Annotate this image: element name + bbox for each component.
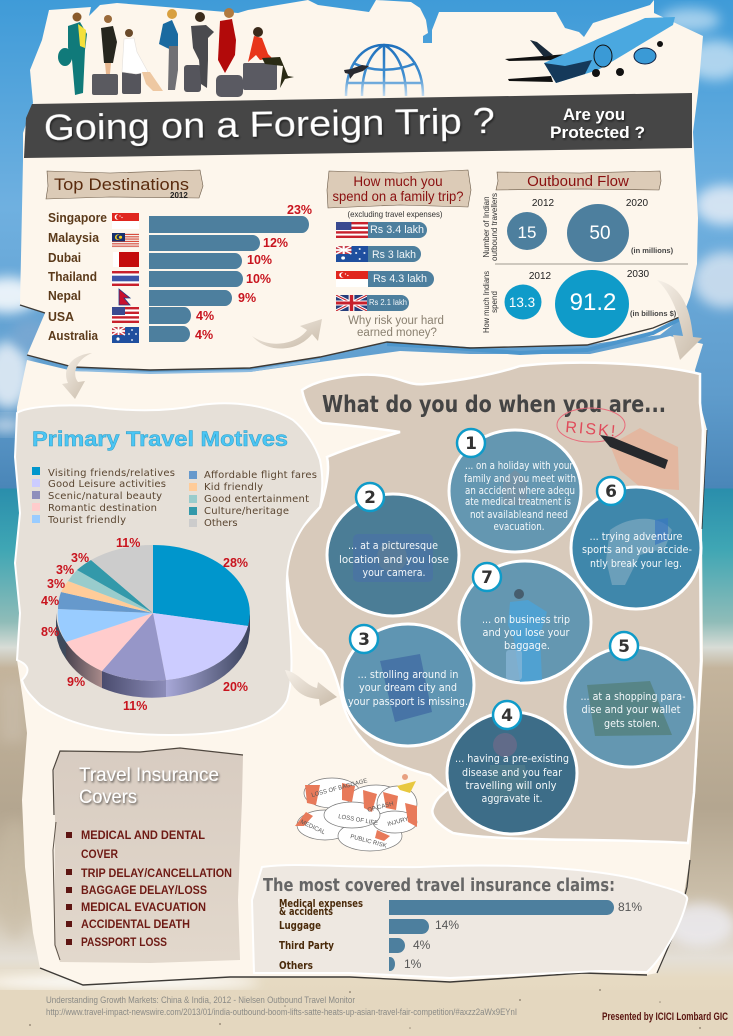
bar chart: claims: & accidents — [279, 906, 333, 918]
scenario 4 — [447, 701, 577, 834]
heading: family trip spending: spend on a family trip? — [332, 189, 464, 204]
pie chart: 28% — [223, 556, 248, 570]
country flags — [112, 213, 139, 343]
spending rows: Rs 2.1 lakh — [369, 297, 407, 307]
legend: Visiting friends/relatives — [48, 468, 175, 479]
bar chart: destinations: 10% — [247, 253, 272, 267]
scenario 2: ... at a picturesque — [348, 539, 438, 552]
pie chart — [41, 536, 250, 713]
callout: why risk — [348, 315, 444, 339]
scenario 5: gets stolen. — [604, 717, 660, 730]
panel: primary travel motives background — [15, 403, 322, 735]
scenario 1: an accident where adequ — [465, 484, 575, 497]
scenario 1: family and you meet with — [464, 472, 576, 485]
bar chart: claims: 14% — [435, 918, 459, 932]
illustration: lifebuoy risks: MEDICAL — [299, 819, 326, 836]
subtitle: are you protected: Protected ? — [550, 123, 645, 142]
axis labels: Number of Indian — [482, 196, 491, 258]
subtitle: are you protected: Are you — [563, 105, 625, 124]
scenario 4: aggravate it. — [482, 792, 542, 805]
bubble chart: number of travellers: (in millions) — [631, 246, 674, 255]
icon: globe with small plane — [344, 45, 423, 96]
icon: hand writing risk — [557, 408, 679, 490]
scenario 2: location and you lose — [339, 553, 449, 566]
heading: top destinations: 2012 — [170, 191, 188, 200]
pie chart: 11% — [123, 699, 147, 713]
heading: outbound flow — [496, 171, 661, 190]
source citations: http://www.travel-impact-newswire.com/2013/01/india-outbound-boom-lifts-satte-heats-up-asian-travel-fair-competition/#axzz2aWx9EYnI — [46, 1007, 517, 1017]
panel: travel insurance covers — [53, 748, 243, 963]
scenario 5: ... at a shopping para- — [580, 690, 686, 703]
bar chart: destinations: 23% — [287, 203, 312, 217]
scenario 1: ... on a holiday with your — [465, 459, 573, 472]
bubble chart: number of travellers: 2012 — [532, 198, 555, 209]
bubble chart: spending — [504, 269, 677, 338]
title: Going on a Foreign Trip ? — [43, 100, 495, 148]
bubble chart: number of travellers: 15 — [518, 223, 536, 242]
country labels: Singapore — [48, 210, 107, 225]
scenario 1: 1 — [465, 434, 477, 454]
scenario 2: your camera. — [362, 566, 426, 579]
heading: what do you do when you are: What do you do when you are... — [322, 392, 666, 418]
bar chart: claims: 81% — [618, 900, 642, 914]
legend: Affordable flight fares — [204, 470, 317, 481]
panel: family trip spending — [327, 170, 471, 339]
bubble chart: number of travellers: 2020 — [626, 198, 649, 209]
bar chart: claims: 1% — [404, 957, 422, 971]
legend: Tourist friendly — [47, 515, 126, 526]
panel: family trip spending: (excluding travel expenses) — [348, 209, 443, 219]
panel: what do you do background blob — [287, 363, 703, 843]
heading: travel insurance covers: Covers — [79, 787, 137, 808]
scenario 4: ... having a pre-existing — [455, 752, 569, 765]
scenario 7: and you lose your — [482, 626, 570, 639]
legend: Good entertainment — [204, 494, 309, 505]
scenario 6: 6 — [605, 482, 617, 502]
country labels: Nepal — [48, 288, 81, 303]
country labels: Dubai — [48, 250, 81, 265]
bar chart: destinations: 4% — [196, 309, 214, 323]
illustration: lifebuoy risks: LOSS OF BAGGAGE — [311, 778, 368, 799]
illustration: lifebuoy risks: OF CASH — [367, 801, 394, 814]
pie chart: 4% — [41, 594, 59, 608]
scenario 4: 4 — [501, 706, 513, 726]
panel: outbound flow — [482, 171, 688, 338]
callout: why risk: earned money? — [357, 327, 437, 339]
scenario 1: evacuation. — [494, 520, 544, 533]
heading: outbound flow: Outbound Flow — [527, 173, 629, 190]
pie chart: 3% — [47, 577, 65, 591]
country labels — [48, 210, 107, 343]
scenario 7: 7 — [481, 568, 493, 588]
illustration: lifebuoy risks — [295, 774, 417, 851]
list of covers: PASSPORT LOSS — [81, 935, 167, 949]
bar chart: destinations: 10% — [246, 272, 271, 286]
scenario 1: ate medical treatment is — [465, 495, 571, 508]
arrow: motives to scenarios — [285, 670, 337, 706]
bubble chart: spending: 13.3 — [509, 295, 535, 310]
country labels: Malaysia — [48, 230, 100, 245]
arrow: destinations to motives — [62, 353, 92, 399]
list of covers: ACCIDENTAL DEATH — [81, 917, 190, 931]
scenario 4: disease and you fear — [462, 766, 562, 779]
bar chart: claims — [279, 898, 642, 972]
spending rows — [336, 222, 434, 311]
bubble chart: number of travellers — [507, 198, 674, 262]
bar chart: destinations: 4% — [195, 328, 213, 342]
illustration: lifebuoy risks: LOSS OF LIFE — [338, 814, 378, 827]
heading: top destinations — [46, 170, 203, 200]
scenario 3: your passport is missing. — [348, 695, 468, 708]
bubble chart: number of travellers: 50 — [589, 223, 611, 244]
subtitle: are you protected — [550, 105, 645, 142]
title banner — [24, 93, 692, 158]
pie chart: 11% — [116, 536, 140, 550]
scenario 4: travelling will only — [466, 779, 557, 792]
torn paper: upper sheet — [20, 0, 703, 373]
spending rows: Rs 4.3 lakh — [373, 273, 427, 285]
panel: most covered claims — [252, 865, 687, 978]
bar chart: claims: Medical expenses — [279, 898, 363, 910]
country labels: USA — [48, 309, 75, 324]
scenario 6: sports and you accide- — [582, 543, 692, 556]
pie chart: 9% — [67, 675, 85, 689]
illustration: group of travellers — [58, 8, 294, 97]
icon: airplane — [505, 17, 675, 83]
scenario 5 — [565, 632, 695, 767]
bubble chart: spending: (in billions $) — [630, 309, 677, 318]
scenario 7 — [459, 561, 591, 683]
pie chart: 20% — [223, 680, 248, 694]
legend: Kid friendly — [204, 482, 263, 493]
scenario 6: ntly break your leg. — [590, 557, 682, 570]
bubble chart: spending: 2012 — [529, 271, 552, 282]
panel: primary travel motives — [32, 428, 317, 713]
arrow: outbound flow to what do you do — [657, 280, 702, 360]
list of covers: MEDICAL EVACUATION — [81, 900, 206, 914]
source citations — [46, 995, 517, 1017]
heading: family trip spending — [327, 170, 471, 208]
scenario 1: not availableand need — [470, 508, 568, 521]
spending rows: Rs 3.4 lakh — [370, 224, 424, 236]
heading: travel insurance covers — [79, 765, 219, 808]
list of covers — [66, 828, 232, 949]
bubble chart: spending: 91.2 — [570, 289, 616, 316]
icon: hand writing risk: RISK! — [565, 419, 616, 440]
pie chart: 3% — [71, 551, 89, 565]
pie chart: 3% — [56, 563, 74, 577]
heading: family trip spending: How much you — [353, 174, 443, 189]
scenario 7: baggage. — [504, 639, 550, 652]
spending rows: Rs 3 lakh — [372, 249, 416, 261]
pie chart: 8% — [41, 625, 59, 639]
bar chart: destinations: 12% — [263, 236, 288, 250]
legend: Others — [204, 518, 238, 529]
axis labels: How much Indians — [482, 271, 491, 333]
scenario 2 — [327, 483, 459, 616]
scenario 3 — [342, 624, 474, 746]
scenario 7: ... on business trip — [482, 613, 570, 626]
scenario 6: ... trying adventure — [590, 530, 683, 543]
bar chart: destinations — [149, 203, 312, 342]
callout: why risk: Why risk your hard — [348, 315, 444, 327]
scenario 1 — [449, 429, 581, 552]
axis labels — [482, 193, 499, 333]
list of covers: TRIP DELAY/CANCELLATION — [81, 866, 232, 880]
scenario 6 — [571, 477, 701, 609]
legend: Culture/heritage — [204, 506, 289, 517]
bar chart: claims: Third Party — [279, 940, 334, 952]
list of covers: BAGGAGE DELAY/LOSS — [81, 883, 207, 897]
heading: top destinations: Top Destinations — [54, 175, 189, 194]
bar chart: claims: Luggage — [279, 920, 321, 932]
illustration: lifebuoy risks: INJURY — [387, 817, 409, 828]
source citations: Understanding Growth Markets: China & India, 2012 - Nielsen Outbound Travel Monitor — [46, 995, 355, 1006]
country labels: Australia — [48, 328, 99, 343]
bar chart: claims: Others — [279, 960, 313, 972]
scenario 3: ... strolling around in — [358, 668, 459, 681]
scenario 3: 3 — [358, 630, 370, 650]
torn paper: lower sheet — [15, 336, 707, 985]
axis labels: outbound travellers — [490, 193, 499, 261]
legend — [32, 467, 317, 529]
scenario 5: 5 — [618, 637, 630, 657]
panel: top destinations — [46, 170, 312, 343]
bubble chart: spending: 2030 — [627, 269, 650, 280]
bar chart: destinations: 9% — [238, 291, 256, 305]
legend: Romantic destination — [48, 503, 157, 514]
list of covers: MEDICAL AND DENTAL — [81, 828, 205, 842]
country labels: Thailand — [48, 269, 97, 284]
heading: travel insurance covers: Travel Insurance — [79, 765, 219, 786]
heading: most covered claims: The most covered travel insurance claims: — [263, 875, 615, 896]
axis labels: spend — [490, 291, 499, 313]
illustration: lifebuoy risks: PUBLIC RISK — [349, 834, 387, 850]
heading: primary travel motives: Primary Travel Motives — [32, 428, 288, 451]
scenario 5: dise and your wallet — [582, 703, 681, 716]
bar chart: claims: 4% — [413, 938, 431, 952]
arrow: destinations to spending — [252, 319, 322, 349]
list of covers: COVER — [81, 847, 118, 861]
legend: Good Leisure activities — [48, 479, 166, 490]
legend: Scenic/natural beauty — [48, 491, 162, 502]
scenario 3: your dream city and — [359, 681, 457, 694]
scenario 2: 2 — [364, 488, 376, 508]
